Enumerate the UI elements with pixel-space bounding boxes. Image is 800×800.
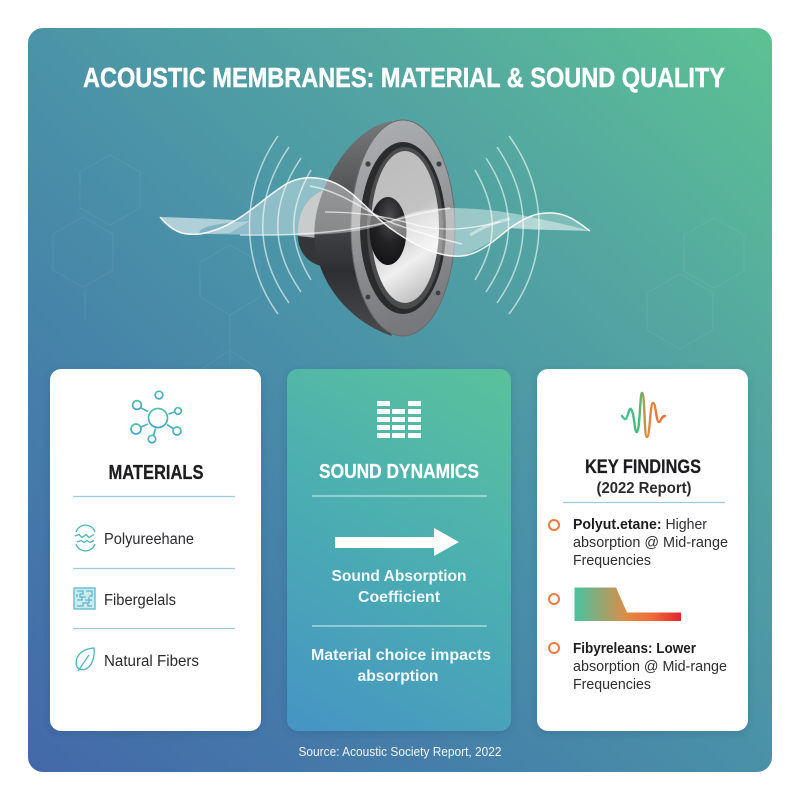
item: natural fibers	[76, 648, 199, 671]
finding text: Fibyreleans: Lower	[573, 640, 696, 657]
speaker magnet	[298, 188, 340, 245]
heading: sound dynamics: SOUND DYNAMICS	[319, 461, 479, 483]
label: natural fibers: Natural Fibers	[104, 653, 199, 670]
icon: equalizer	[377, 401, 421, 438]
finding text: Polyut.etane: Higher	[573, 516, 707, 533]
heading: key findings: KEY FINDINGS	[585, 457, 701, 478]
subheading: 2022 report: (2022 Report)	[596, 480, 692, 497]
item: fiberglass	[74, 588, 176, 609]
bullet	[549, 520, 559, 530]
text: sound absorption coefficient: Sound Absorption	[332, 568, 466, 585]
label: fiberglass: Fibergelals	[104, 592, 176, 609]
bullet	[549, 643, 559, 653]
icon: molecule network	[131, 391, 181, 443]
source note: Source: Acoustic Society Report, 2022	[298, 745, 502, 759]
speaker dust cap	[370, 197, 406, 265]
speaker surround	[360, 142, 446, 314]
finding text: absorption @ Mid-range	[573, 534, 728, 551]
finding: polyurethane	[549, 516, 728, 569]
finding text	[573, 640, 727, 693]
speaker basket	[314, 121, 392, 336]
sound arcs: left	[250, 136, 311, 314]
speaker screws	[365, 161, 442, 300]
illustration: speaker with sound waves	[160, 120, 590, 336]
translucent membrane wave	[160, 178, 590, 256]
absorption drop chart	[574, 588, 681, 621]
speaker cone	[371, 151, 439, 303]
finding: fibreglass	[549, 640, 727, 693]
finding text: Frequencies	[573, 676, 651, 693]
item: polyurethane	[75, 525, 194, 551]
panel: materials	[50, 369, 261, 731]
finding: gradient chart	[549, 588, 681, 621]
text: material choice: absorption	[358, 668, 438, 685]
finding text: Frequencies	[573, 552, 651, 569]
sound arcs: right	[475, 136, 539, 314]
text: sound absorption coefficient: Coefficient	[358, 589, 441, 606]
text: sound absorption coefficient	[332, 568, 466, 606]
speaker rim	[351, 120, 455, 336]
text: material choice	[311, 647, 491, 685]
finding text: absorption @ Mid-range	[573, 658, 727, 675]
label: polyurethane: Polyureehane	[104, 531, 194, 548]
panel: sound dynamics	[287, 369, 511, 731]
panel: key findings	[537, 369, 748, 731]
heading: materials: MATERIALS	[108, 461, 204, 484]
finding text	[573, 516, 728, 569]
background hexagon pattern	[53, 155, 744, 370]
icon: wave circle	[75, 525, 95, 551]
icon: leaf	[76, 648, 94, 671]
icon: waveform	[622, 393, 665, 437]
text: material choice: Material choice impacts	[311, 647, 491, 664]
icon: maze square	[74, 588, 95, 609]
bullet	[549, 594, 559, 604]
arrow	[335, 528, 459, 556]
